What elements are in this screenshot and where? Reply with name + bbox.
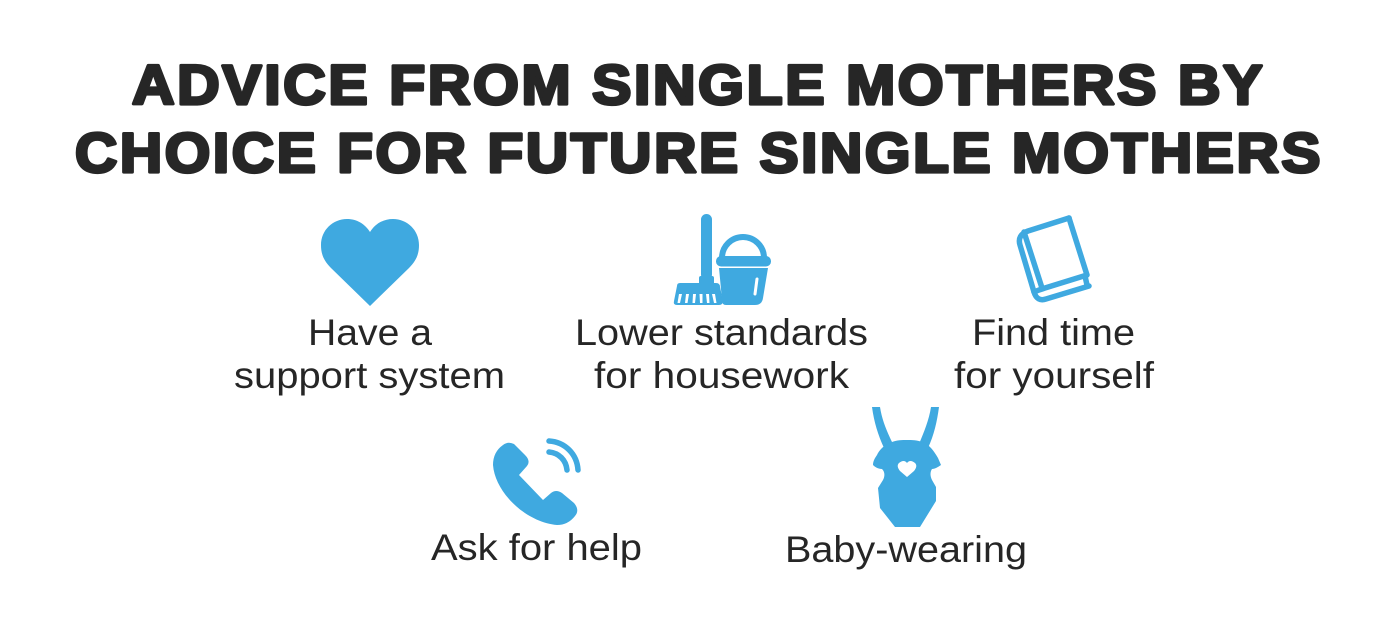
text: find time for yourself [954,312,1155,396]
text: find time for yourself: for yourself [954,355,1155,396]
icon: heart [321,219,419,306]
text: baby-wearing: Baby-wearing [785,529,1027,570]
icon: broom and bucket [674,214,771,305]
icon: phone [493,441,578,525]
title: ADVICE FROM SINGLE MOTHERS BY [132,53,1265,116]
icon: book [1019,218,1089,300]
text: lower standards for housework: Lower standards [575,312,868,353]
text: have a support system: Have a [308,312,432,353]
text: lower standards for housework [575,312,868,396]
text: have a support system [234,312,505,396]
text: find time for yourself: Find time [972,312,1135,353]
text: ask for help: Ask for help [431,527,642,568]
text: lower standards for housework: for housework [594,355,850,396]
icon: baby carrier [872,407,941,527]
title [75,53,1323,184]
text: have a support system: support system [234,355,505,396]
title: CHOICE FOR FUTURE SINGLE MOTHERS [75,121,1323,184]
